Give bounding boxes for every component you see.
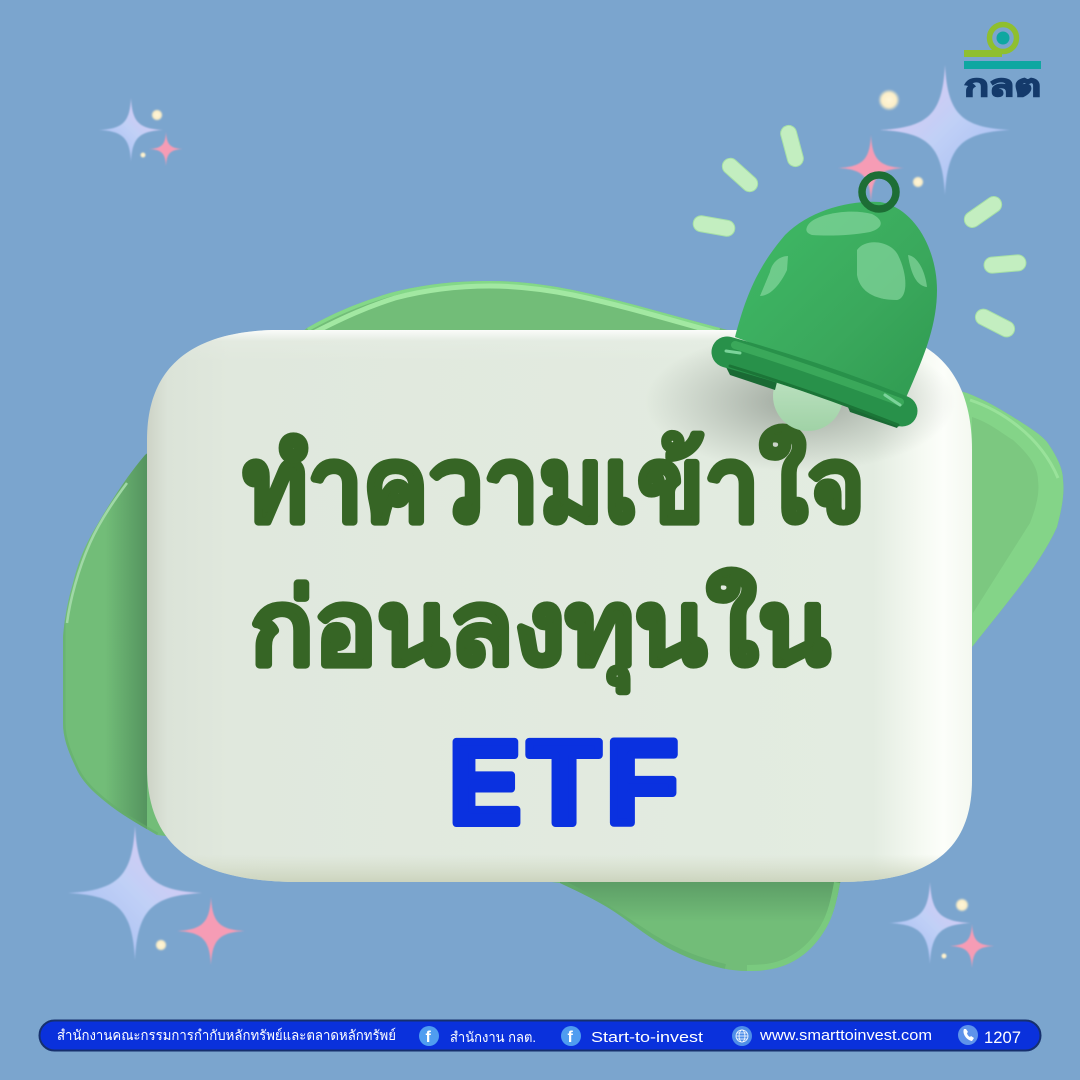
logo: SEC Thailand: กลต bbox=[964, 70, 1041, 103]
green blob behind card bbox=[40, 270, 1080, 990]
sparkles: top right bbox=[838, 65, 1010, 201]
title: line 1: ทำความเข้าใจ bbox=[243, 426, 865, 544]
title: ETF bbox=[449, 717, 678, 849]
bell body bbox=[735, 202, 937, 400]
footer: website: www.smarttoinvest.com bbox=[759, 1027, 932, 1044]
title: ETF: E bbox=[449, 717, 521, 849]
icon: globe bbox=[732, 1026, 752, 1046]
bell highlights bbox=[760, 212, 927, 300]
icon: facebook 2 bbox=[561, 1026, 581, 1046]
icon: phone bbox=[958, 1025, 978, 1045]
title: ETF: F bbox=[606, 717, 678, 849]
icon: facebook 2: f bbox=[568, 1029, 574, 1046]
sparkles: bottom right bbox=[889, 882, 994, 968]
main card bbox=[147, 330, 972, 882]
rays around bell bbox=[692, 124, 1027, 340]
footer bar bbox=[40, 1020, 1040, 1050]
footer: hotline: 1207 bbox=[984, 1028, 1021, 1047]
title: line 2: ก่อนลงทุนใน bbox=[250, 569, 830, 693]
icon: facebook 1 bbox=[419, 1026, 439, 1046]
icon: facebook 1: f bbox=[426, 1029, 432, 1046]
footer: start to invest: Start-to-invest bbox=[591, 1029, 704, 1046]
bell ring bbox=[862, 175, 896, 209]
logo: SEC Thailand bbox=[964, 24, 1041, 103]
icon: green bell bbox=[725, 175, 937, 431]
footer: organisation: สำนักงานคณะกรรมการกำกับหลักทรัพย์และตลาดหลักทรัพย์ bbox=[57, 1027, 396, 1043]
bell clapper bbox=[773, 361, 843, 431]
sparkles: bottom left bbox=[68, 826, 245, 965]
bell brim bbox=[726, 345, 902, 425]
sparkles: top left bbox=[99, 98, 183, 166]
title: ETF: T bbox=[528, 717, 600, 849]
footer: facebook SEC: สำนักงาน กลต. bbox=[450, 1029, 536, 1045]
bell underside bbox=[725, 365, 905, 428]
